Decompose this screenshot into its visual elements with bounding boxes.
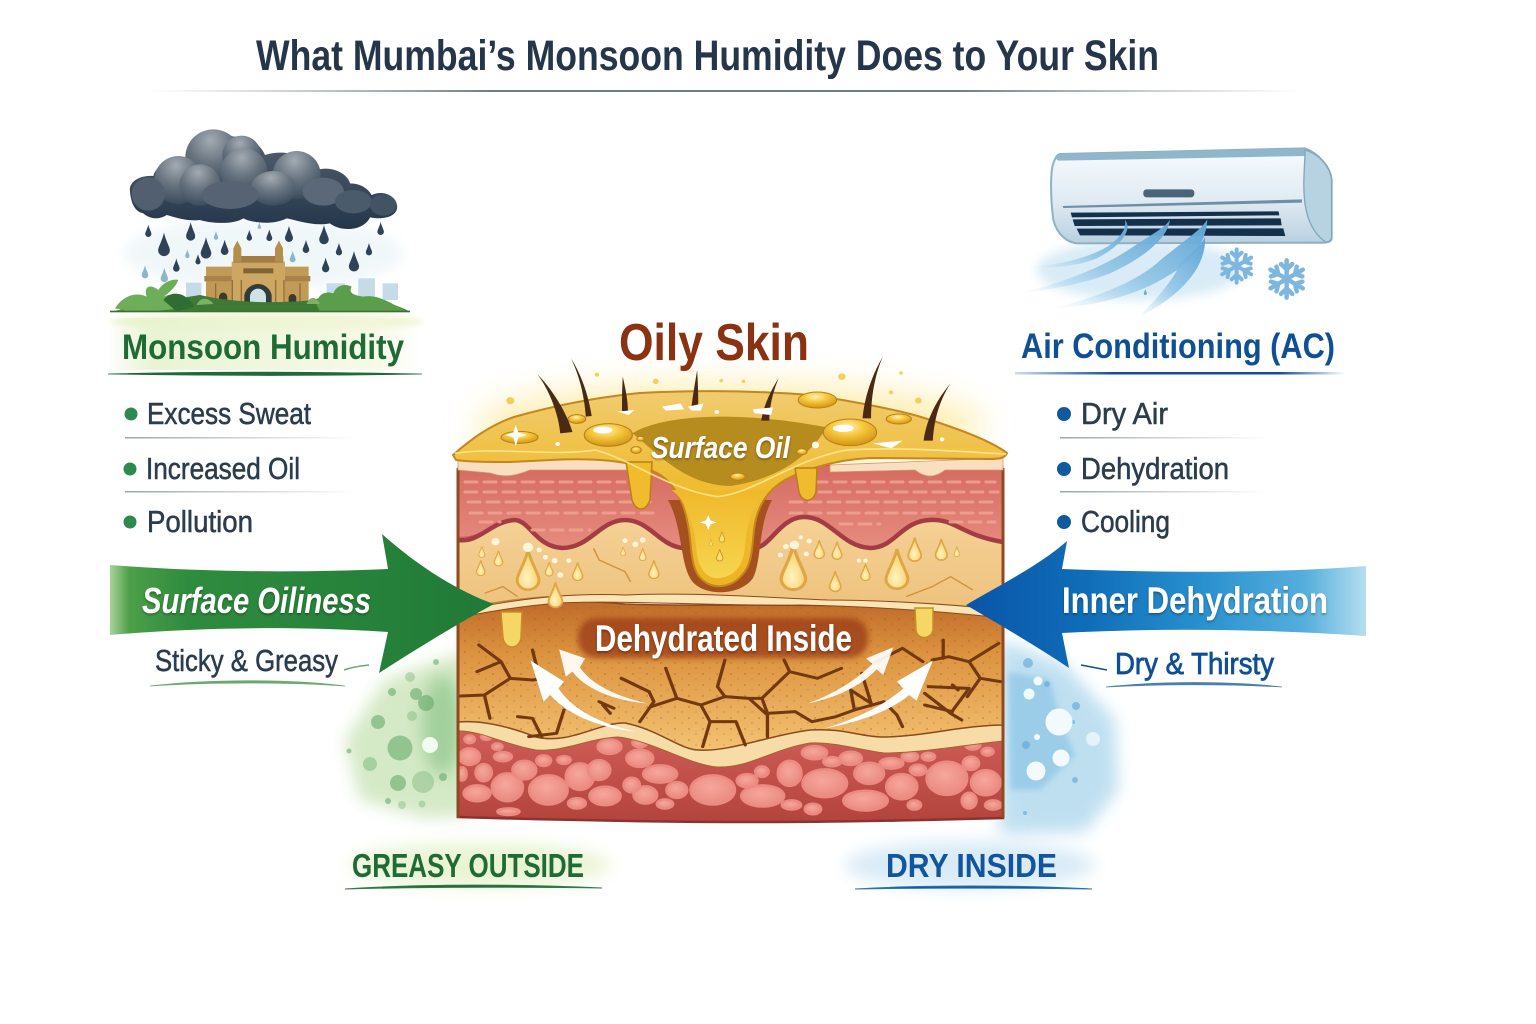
block side edges bbox=[458, 468, 1003, 818]
skin cross-section bbox=[453, 357, 1007, 822]
list: monsoon factors: Pollution bbox=[147, 504, 253, 539]
label: dry inside: DRY INSIDE bbox=[886, 847, 1057, 884]
heading: monsoon humidity: Monsoon Humidity bbox=[122, 328, 404, 367]
hairs bbox=[537, 357, 951, 441]
list: monsoon factors bbox=[124, 396, 360, 539]
Gateway of India monument bbox=[204, 241, 310, 304]
sparkles and highlights bbox=[505, 403, 944, 530]
layer: dry cracked dermis bbox=[458, 602, 1003, 750]
surface oil pool bbox=[455, 357, 1006, 561]
list: monsoon factors: Excess Sweat bbox=[147, 396, 311, 431]
drops in central drip bbox=[709, 532, 725, 561]
air streams bbox=[1020, 219, 1207, 318]
caption: dry and thirsty: Dry & Thirsty bbox=[1115, 646, 1274, 681]
arrow: inner dehydration bbox=[966, 541, 1366, 668]
caption: sticky and greasy: Sticky & Greasy bbox=[155, 643, 338, 678]
arrow: surface oiliness: Surface Oiliness bbox=[142, 580, 371, 621]
oily skin heading: Oily Skin bbox=[619, 314, 809, 372]
caption: dry and thirsty bbox=[1081, 646, 1282, 687]
list: AC factors bbox=[1057, 396, 1270, 539]
AC unit bbox=[1051, 148, 1332, 243]
green splatter bbox=[345, 650, 470, 818]
heading: monsoon humidity bbox=[108, 318, 422, 376]
oil specks above dome bbox=[506, 371, 922, 404]
distant buildings bbox=[186, 278, 398, 300]
cream strip below oil bbox=[458, 457, 1003, 476]
layer: cream wave bbox=[458, 722, 1003, 767]
yellow drips entering dry layer bbox=[501, 612, 522, 647]
list: AC factors: Cooling bbox=[1081, 504, 1170, 539]
label: greasy outside: GREASY OUTSIDE bbox=[352, 847, 584, 884]
label: dry inside bbox=[845, 841, 1095, 889]
list: AC factors: Dry Air bbox=[1081, 396, 1168, 431]
brown halo around central drip bbox=[668, 500, 772, 592]
title: What Mumbai’s Monsoon Humidity Does to Your Skin bbox=[256, 32, 1159, 80]
arrows: moisture leaving the dermis bbox=[531, 647, 933, 732]
oil bubbles bbox=[501, 392, 911, 480]
label: dehydrated inside: Dehydrated Inside bbox=[595, 618, 852, 659]
cracks bbox=[460, 640, 1001, 747]
label: surface oil: Surface Oil bbox=[651, 430, 791, 465]
heading: air conditioning: Air Conditioning (AC) bbox=[1021, 327, 1335, 366]
blue splatter bbox=[1000, 640, 1118, 835]
arrow: surface oiliness bbox=[110, 534, 494, 673]
snowflakes bbox=[1220, 249, 1254, 283]
tan layer cracks and droplets bbox=[476, 535, 973, 607]
oil drip and surface bbox=[453, 391, 1007, 586]
list: AC factors: Dehydration bbox=[1081, 451, 1229, 486]
rain drops bbox=[145, 222, 384, 272]
yellow glow behind skin bbox=[475, 383, 985, 467]
cream strip bbox=[458, 594, 1003, 618]
arrow: inner dehydration: Inner Dehydration bbox=[1062, 580, 1328, 621]
illustration: monsoon cloud and Gateway of India bbox=[110, 129, 423, 331]
illustration: air conditioner with cold airflow bbox=[1020, 148, 1332, 318]
cloud bbox=[130, 129, 397, 229]
pink tissue texture bbox=[465, 482, 998, 530]
layer: red fat base bbox=[458, 722, 1003, 822]
fat cells bbox=[458, 733, 1001, 815]
foliage and ground bbox=[110, 280, 410, 312]
layer: tan epidermis bbox=[458, 500, 1003, 610]
side oil drips bbox=[626, 462, 652, 509]
layer: pink dermis bbox=[458, 464, 1003, 547]
list: monsoon factors: Increased Oil bbox=[146, 451, 300, 486]
